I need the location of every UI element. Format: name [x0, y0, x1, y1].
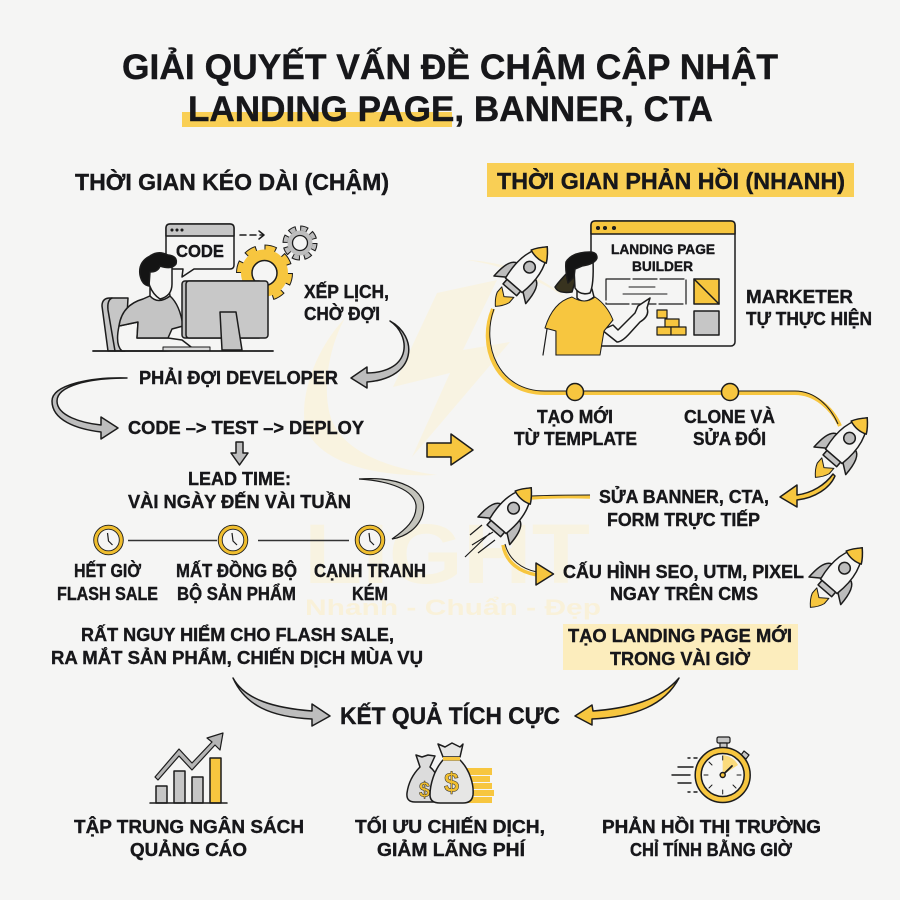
- text: scheduling: [304, 281, 389, 324]
- icon: growth chart: [150, 733, 227, 803]
- text: danger warning: RẤT NGUY HIỂM CHO FLASH SALE,: [81, 624, 394, 645]
- icon: monitor: [163, 281, 268, 351]
- icon: big yellow gear: [240, 248, 290, 298]
- text: market response: CHỈ TÍNH BẰNG GIỜ: [630, 839, 792, 860]
- icon: money bags and coins: [407, 743, 494, 803]
- text: clone and edit: [684, 406, 775, 449]
- text: lead time: [128, 468, 351, 512]
- panel: builder window: [591, 221, 735, 346]
- icon: dashed arrow: [240, 231, 264, 239]
- text: optimise campaigns: GIẢM LÃNG PHÍ: [377, 839, 526, 860]
- arrow: crescent: [359, 479, 424, 539]
- text: must wait for developer: PHẢI ĐỢI DEVELOPER: [139, 367, 338, 388]
- text: out of sync: MẤT ĐỒNG BỘ: [176, 560, 297, 581]
- text: create from template: TỪ TEMPLATE: [514, 428, 637, 449]
- text: weak competition: CẠNH TRANH: [314, 560, 426, 581]
- text: edit banner: [599, 486, 769, 530]
- marker: step 2: [722, 384, 738, 400]
- callout: new landing page in hours: [563, 624, 798, 670]
- icon: code window: CODE: [176, 241, 224, 261]
- icon: rocket middle right: [800, 404, 883, 491]
- text: focus budget: [74, 816, 304, 860]
- text: weak competition: KÉM: [352, 583, 388, 604]
- text: optimise campaigns: TỐI ƯU CHIẾN DỊCH,: [355, 816, 545, 837]
- text: marketer self-serve: [746, 286, 872, 329]
- text: code test deploy: CODE –> TEST –> DEPLOY: [128, 417, 365, 438]
- text: optimise campaigns: [355, 816, 545, 860]
- text: edit banner: FORM TRỰC TIẾP: [607, 509, 760, 530]
- icon: marketer: [543, 252, 650, 355]
- arrow: rocket to seo config: [503, 544, 554, 585]
- text: seo config: NGAY TRÊN CMS: [610, 583, 758, 604]
- icon: small gear: [286, 228, 314, 258]
- text: marketer self-serve: TỰ THỰC HIỆN: [746, 308, 872, 329]
- illustration: landing page builder: [543, 221, 735, 355]
- icon: chair: [102, 298, 128, 351]
- text: marketer self-serve: MARKETER: [746, 286, 853, 307]
- line: edit banner to rocket: [531, 495, 590, 498]
- icon: clock 3: [355, 525, 385, 555]
- icon: money bags and coins: $: [419, 779, 430, 802]
- icon: rocket bottom right: [795, 534, 878, 621]
- arrow: developer to code: [52, 378, 127, 439]
- text: seo config: [563, 561, 804, 604]
- text: danger warning: [51, 624, 423, 668]
- text: scheduling: XẾP LỊCH,: [304, 281, 389, 302]
- text: flash sale timeout: FLASH SALE: [57, 583, 158, 604]
- callout: new landing page in hours: TRONG VÀI GIỜ: [610, 648, 750, 669]
- arrow: rocket to edit banner: [780, 474, 835, 507]
- callout: new landing page in hours: TẠO LANDING PAGE MỚI: [568, 625, 792, 646]
- arrow: fast to result: [575, 678, 679, 725]
- icon: rocket top left: [480, 233, 563, 320]
- icon: stopwatch: [672, 737, 750, 802]
- path: yellow flow line: [488, 309, 840, 426]
- icon: image block: [694, 279, 719, 304]
- text: focus budget: QUẢNG CÁO: [130, 839, 247, 860]
- icon: code window: [166, 224, 234, 277]
- panel: builder window: LANDING PAGE: [611, 241, 715, 257]
- text: scheduling: CHỜ ĐỢI: [304, 303, 380, 324]
- arrow: slow to fast: [427, 434, 473, 465]
- heading: slow: THỜI GIAN KÉO DÀI (CHẬM): [75, 168, 389, 195]
- text: seo config: CẤU HÌNH SEO, UTM, PIXEL: [563, 561, 804, 582]
- dashed placeholder box: [606, 279, 686, 304]
- text: lead time: LEAD TIME:: [188, 468, 291, 489]
- icon: clock 1: [94, 525, 123, 555]
- icon: bricks: [657, 310, 686, 335]
- text: clone and edit: CLONE VÀ: [684, 406, 775, 427]
- panel: builder window: BUILDER: [632, 258, 693, 274]
- timeline: three clocks: [94, 525, 385, 555]
- text: weak competition: [314, 560, 426, 604]
- watermark logo: [304, 260, 601, 620]
- text: out of sync: BỘ SẢN PHẨM: [177, 583, 296, 604]
- text: flash sale timeout: [57, 560, 158, 604]
- marker: step 1: [566, 384, 584, 400]
- title: [122, 47, 778, 129]
- icon: money bags and coins: $: [444, 767, 459, 798]
- text: market response: PHẢN HỒI THỊ TRƯỜNG: [602, 816, 821, 837]
- arrow: slow to result: [233, 678, 330, 726]
- watermark logo: LIGHT: [304, 507, 590, 601]
- watermark logo: Nhanh - Chuẩn - Đẹp: [305, 595, 601, 620]
- text: create from template: TẠO MỚI: [537, 406, 613, 427]
- text: out of sync: [176, 560, 297, 604]
- text: focus budget: TẬP TRUNG NGÂN SÁCH: [74, 816, 304, 837]
- arrow: scheduling to developer: [351, 321, 409, 388]
- arrow: down: [231, 442, 248, 465]
- text: lead time: VÀI NGÀY ĐẾN VÀI TUẦN: [128, 491, 351, 512]
- heading: positive results: KẾT QUẢ TÍCH CỰC: [340, 701, 560, 730]
- title: GIẢI QUYẾT VẤN ĐỀ CHẬM CẬP NHẬT: [122, 47, 778, 87]
- text: clone and edit: SỬA ĐỔI: [693, 428, 766, 449]
- text: edit banner: SỬA BANNER, CTA,: [599, 486, 769, 507]
- icon: grey block: [694, 311, 719, 335]
- illustration: developer at desk: [93, 224, 314, 351]
- text: create from template: [514, 406, 637, 449]
- text: flash sale timeout: HẾT GIỜ: [74, 560, 141, 581]
- title: LANDING PAGE, BANNER, CTA: [188, 90, 713, 129]
- text: market response: [602, 816, 821, 860]
- desk line: [93, 350, 273, 352]
- icon: clock 2: [218, 525, 248, 555]
- heading: fast: THỜI GIAN PHẢN HỒI (NHANH): [497, 166, 845, 194]
- icon: rocket with speed lines: [465, 474, 547, 557]
- icon: developer: [118, 253, 195, 351]
- text: danger warning: RA MẮT SẢN PHẨM, CHIẾN DỊCH MÙA VỤ: [51, 647, 423, 668]
